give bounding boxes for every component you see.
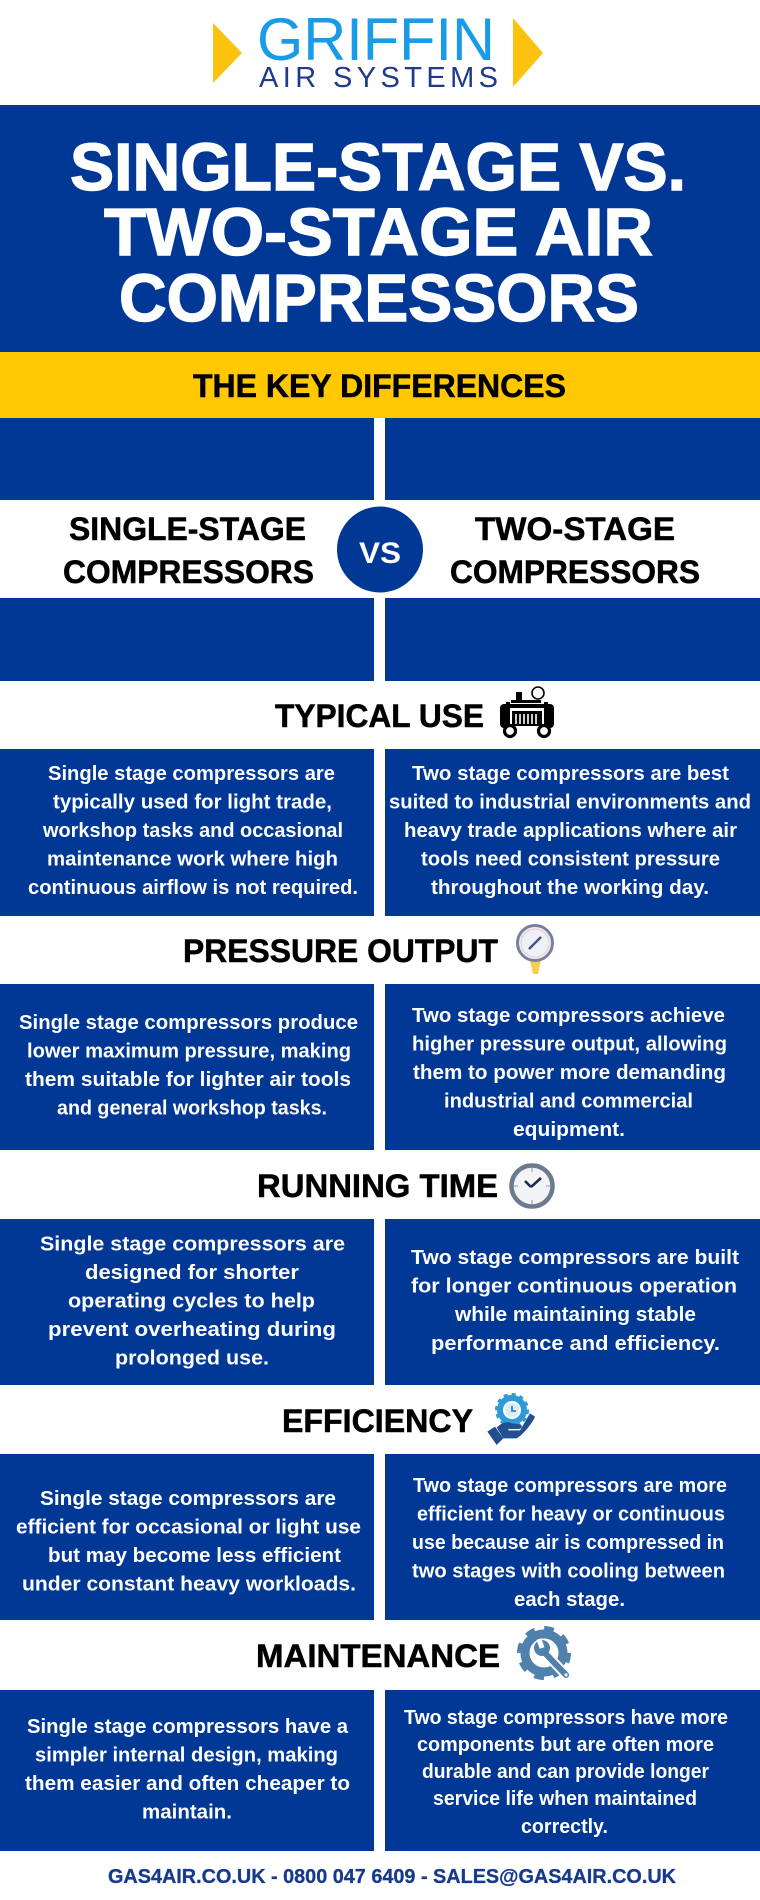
panel: pressure output single stage: and general workshop tasks. [57, 1098, 327, 1120]
panel: efficiency single stage: efficient for occasional or light use [16, 1516, 361, 1538]
panel: pressure output single stage: lower maximum pressure, making [27, 1040, 351, 1062]
panel: efficiency two stage: efficient for heavy or continuous [417, 1504, 725, 1526]
panel: running time single stage: operating cycles to help [68, 1290, 315, 1312]
panel: efficiency two stage: use because air is compressed in [412, 1532, 724, 1554]
panel: running time single stage: designed for shorter [85, 1262, 299, 1284]
panel: running time single stage: prevent overheating during [48, 1319, 336, 1341]
icon: clock [512, 1166, 552, 1206]
panel: running time two stage: while maintaining stable [454, 1304, 696, 1326]
panel: pressure output two stage: them to power more demanding [413, 1062, 726, 1084]
icon: hand with gear [487, 1395, 535, 1445]
panel: maintenance single stage: them easier and often cheaper to [25, 1773, 350, 1795]
panel: efficiency two stage: two stages with cooling between [412, 1560, 725, 1582]
heading: maintenance: MAINTENANCE [256, 1638, 500, 1674]
panel: pressure output single stage: them suitable for lighter air tools [25, 1069, 351, 1091]
panel: typical use two stage: heavy trade applications where air [404, 820, 737, 842]
panel: running time two stage [385, 1219, 760, 1385]
heading: running time: RUNNING TIME [257, 1168, 498, 1204]
panel: efficiency two stage: Two stage compressors are more [413, 1475, 727, 1497]
panel: maintenance single stage: simpler internal design, making [35, 1744, 338, 1766]
panel: efficiency single stage: but may become less efficient [48, 1545, 341, 1567]
heading: efficiency: EFFICIENCY [282, 1403, 473, 1439]
panel: pressure output two stage: industrial and commercial [444, 1090, 693, 1112]
logo [213, 6, 543, 94]
panel: title: COMPRESSORS [119, 261, 639, 336]
icon: compressor [500, 687, 554, 736]
panel: title [0, 105, 760, 352]
panel: typical use single stage: typically used for light trade, [53, 792, 332, 814]
icon: gear and wrench [520, 1629, 568, 1677]
icon: pressure gauge [518, 926, 552, 974]
panel: pressure output two stage: equipment. [513, 1119, 625, 1141]
panel: pressure output two stage [385, 984, 760, 1150]
footer contact line: GAS4AIR.CO.UK - 0800 047 6409 - SALES@GAS4AIR.CO.UK [108, 1866, 677, 1888]
panel: comparison header: COMPRESSORS [450, 554, 700, 590]
panel: typical use single stage: Single stage compressors are [48, 763, 335, 785]
panel: maintenance two stage: Two stage compressors have more [404, 1707, 728, 1729]
panel: efficiency single stage: Single stage compressors are [40, 1488, 336, 1510]
panel: pressure output two stage: Two stage compressors achieve [412, 1005, 725, 1027]
panel: pressure output two stage: higher pressure output, allowing [412, 1034, 727, 1056]
panel: comparison header: VS [359, 537, 401, 570]
panel: maintenance single stage [0, 1690, 374, 1851]
panel: running time single stage: prolonged use. [115, 1348, 269, 1370]
panel: efficiency two stage: each stage. [514, 1589, 625, 1611]
panel: typical use single stage [0, 749, 374, 916]
panel: comparison header: TWO-STAGE [475, 511, 675, 547]
panel: maintenance single stage: maintain. [142, 1802, 232, 1824]
banner: the key differences [0, 352, 760, 418]
panel: typical use two stage: suited to industrial environments and [389, 792, 751, 814]
panel: running time two stage: performance and efficiency. [431, 1333, 720, 1355]
heading: typical use: TYPICAL USE [275, 698, 484, 734]
panel: pressure output single stage: Single stage compressors produce [19, 1012, 358, 1034]
panel: typical use two stage [385, 749, 760, 916]
panel: pressure output single stage [0, 984, 374, 1150]
banner: the key differences: THE KEY DIFFERENCES [193, 368, 566, 404]
panel: maintenance two stage: components but are often more [417, 1734, 714, 1756]
panel: typical use two stage: Two stage compressors are best [412, 763, 729, 785]
panel: efficiency single stage [0, 1454, 374, 1620]
panel: maintenance two stage: durable and can provide longer [422, 1761, 709, 1783]
heading: pressure output: PRESSURE OUTPUT [183, 933, 498, 969]
panel: comparison header: COMPRESSORS [63, 554, 314, 590]
panel: title: SINGLE-STAGE VS. [70, 130, 686, 205]
panel: maintenance single stage: Single stage compressors have a [27, 1716, 349, 1738]
panel: typical use single stage: maintenance work where high [47, 848, 338, 870]
panel: maintenance two stage: correctly. [521, 1816, 608, 1838]
logo: GRIFFIN [257, 6, 495, 73]
panel: running time two stage: Two stage compressors are built [411, 1247, 739, 1269]
panel: comparison header [0, 418, 760, 681]
panel: efficiency single stage: under constant heavy workloads. [22, 1574, 356, 1596]
panel: maintenance two stage: service life when maintained [433, 1788, 697, 1810]
panel: typical use two stage: throughout the working day. [431, 877, 709, 899]
logo: AIR SYSTEMS [259, 62, 498, 94]
panel: typical use single stage: continuous airflow is not required. [28, 877, 358, 899]
panel: running time single stage [0, 1219, 374, 1385]
panel: typical use two stage: tools need consistent pressure [421, 848, 720, 870]
panel: maintenance two stage [385, 1690, 760, 1851]
panel: typical use single stage: workshop tasks and occasional [42, 820, 343, 842]
panel: comparison header: SINGLE-STAGE [69, 511, 306, 547]
panel: efficiency two stage [385, 1454, 760, 1620]
panel: running time single stage: Single stage compressors are [40, 1234, 345, 1256]
panel: title: TWO-STAGE AIR [104, 195, 653, 270]
panel: running time two stage: for longer continuous operation [411, 1276, 737, 1298]
